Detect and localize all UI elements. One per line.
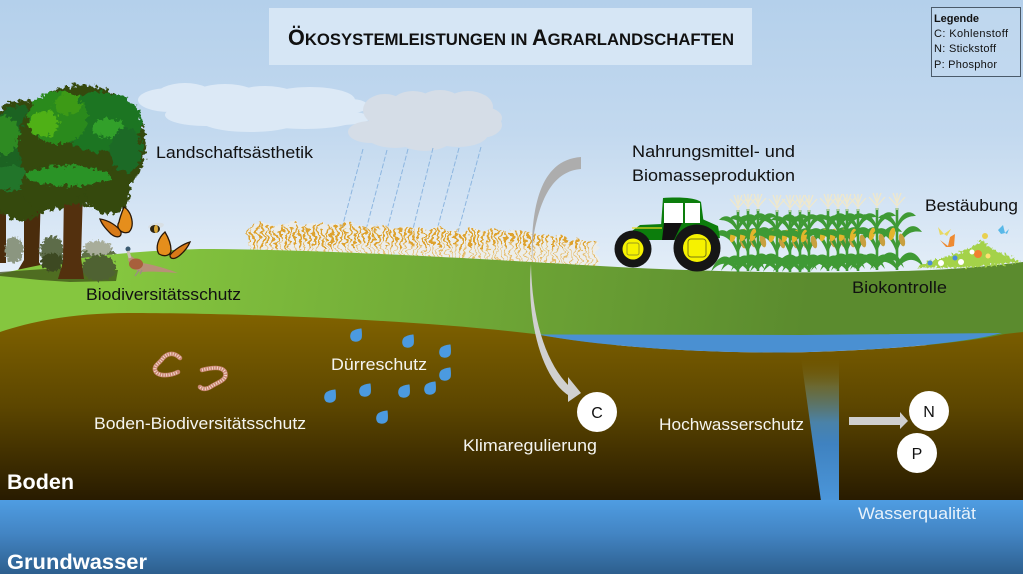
wheat field: [249, 222, 598, 268]
title: ÖKOSYSTEMLEISTUNGEN IN AGRARLANDSCHAFTEN: [288, 25, 734, 50]
label: Biodiversitätsschutz: Biodiversitätsschutz: [86, 285, 241, 304]
circle N: [909, 391, 949, 431]
earthworms: [155, 354, 226, 389]
circle C: C: [591, 405, 603, 422]
bushes front: [41, 253, 116, 281]
carbon arrow lower: [530, 264, 581, 402]
rain lines: [342, 147, 481, 233]
label: Dürreschutz: Dürreschutz: [331, 355, 427, 374]
ground: green hill: [0, 249, 1023, 345]
label: Nahrungsmittel- und Biomasseproduktion: [632, 142, 795, 185]
label: Nahrungsmittel- und Biomasseproduktion: Biomasseproduktion: [632, 166, 795, 185]
tree: main crown: [18, 85, 146, 214]
title: [269, 8, 752, 65]
label: Hochwasserschutz: Hochwasserschutz: [659, 415, 804, 434]
tree: back crown: [0, 100, 64, 220]
groundwater: [0, 500, 1023, 574]
circle P: P: [912, 446, 922, 463]
water channel: [801, 358, 839, 501]
soil: [0, 313, 1023, 501]
circle P: [897, 433, 937, 473]
bushes: [5, 236, 116, 282]
circle N: N: [923, 404, 935, 421]
butterfly: monarch right: [157, 232, 190, 258]
label: Biokontrolle: Biokontrolle: [852, 278, 947, 297]
label: Wasserqualität: Wasserqualität: [858, 504, 976, 523]
label: Grundwasser: Grundwasser: [7, 551, 147, 574]
pheasant: [126, 246, 178, 276]
water drops: [324, 328, 451, 424]
surface water lens: [538, 333, 1002, 352]
flower meadow: [918, 233, 1020, 268]
tree trunks back: [0, 190, 43, 270]
legend: [932, 8, 1020, 76]
carbon arrow upper: [532, 157, 581, 264]
label: Landschaftsästhetik: Landschaftsästhetik: [156, 143, 314, 162]
label: Bestäubung: Bestäubung: [925, 196, 1018, 215]
label: Boden: Boden: [7, 471, 74, 494]
circle C: [577, 392, 617, 432]
meadow butterflies: [938, 225, 1009, 247]
white cloud: [138, 83, 370, 132]
nutrient arrow: [849, 412, 908, 429]
bee: [148, 222, 164, 233]
label: Nahrungsmittel- und Biomasseproduktion: Nahrungsmittel- und: [632, 142, 795, 161]
legend: P: Phosphor: [934, 59, 997, 71]
grey rain cloud: [348, 90, 502, 151]
butterfly: monarch left: [100, 207, 132, 237]
legend: N: Stickstoff: [934, 43, 997, 55]
sky background: [0, 0, 1023, 300]
legend: Legende: [934, 13, 979, 25]
corn plants: [711, 193, 924, 272]
label: Boden-Biodiversitätsschutz: Boden-Biodiversitätsschutz: [94, 414, 306, 433]
legend: C: Kohlenstoff: [934, 28, 1009, 40]
tractor: [614, 197, 720, 272]
label: Klimaregulierung: Klimaregulierung: [463, 436, 597, 455]
tree: main trunk: [58, 190, 84, 279]
tree shadow on ground: [0, 268, 118, 282]
